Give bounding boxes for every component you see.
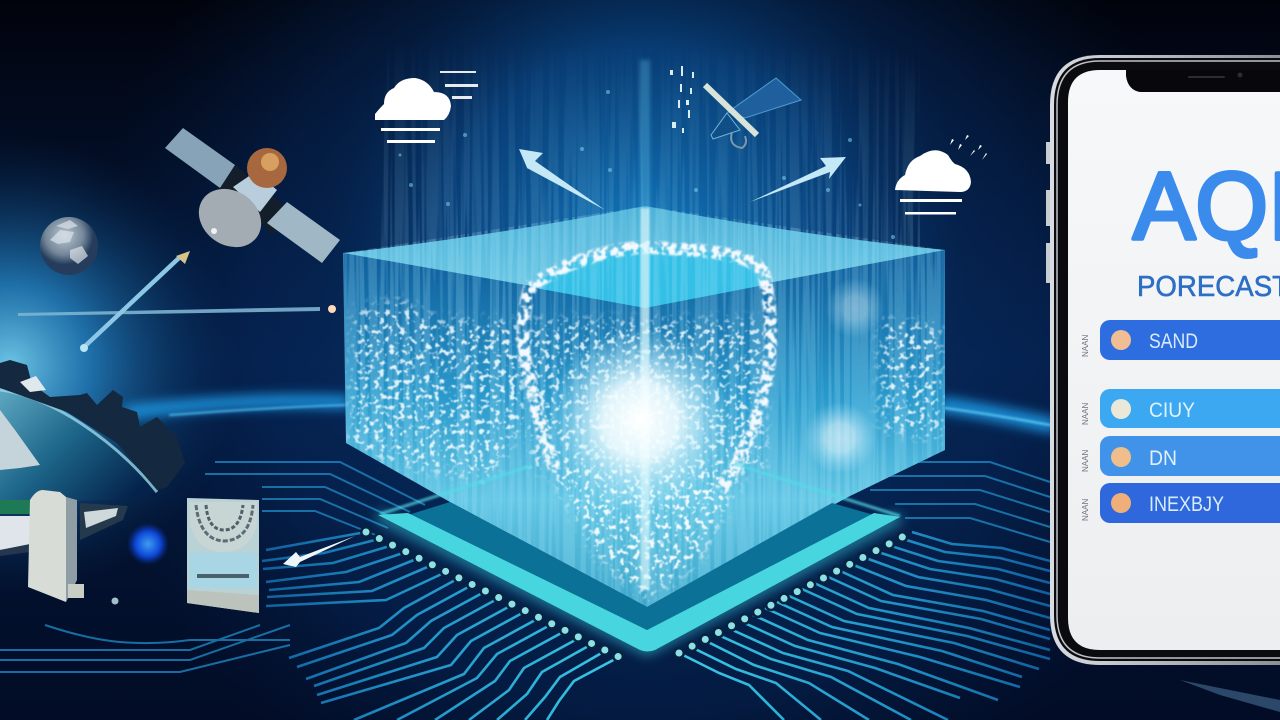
arrow up-left	[519, 149, 605, 210]
vertical beam	[640, 208, 650, 590]
planet earth with city skyline	[0, 360, 185, 556]
light rays above cube	[381, 58, 920, 248]
small arrow	[283, 536, 355, 567]
side buttons	[1046, 142, 1052, 283]
data beam	[18, 305, 336, 316]
small glow dot	[112, 598, 118, 604]
side labels: NAAN	[1081, 335, 1090, 357]
skyline	[0, 360, 185, 490]
floating data particles	[398, 90, 895, 246]
particle cloud	[345, 292, 945, 604]
snow landmass	[0, 410, 40, 470]
side faces	[343, 253, 647, 607]
side labels: NAAN	[1081, 403, 1090, 425]
horizontal glow lines behind cube	[130, 401, 1050, 425]
row: SAND	[1100, 320, 1280, 360]
blue orb	[127, 523, 169, 565]
row: DAY	[1100, 436, 1280, 476]
row: DAY: DN	[1149, 447, 1177, 470]
rocket arrow	[80, 251, 190, 352]
upper circuit traces	[0, 462, 1050, 672]
arrow up-right	[750, 157, 846, 202]
top face	[343, 206, 945, 306]
phone	[1046, 55, 1280, 665]
cloud icon left	[375, 71, 478, 143]
row: CITY	[1100, 389, 1280, 428]
circuit traces left of chip	[262, 532, 619, 720]
moon	[40, 217, 98, 275]
notch	[1126, 70, 1280, 92]
particle ring	[515, 240, 779, 495]
row: CITY: CIUY	[1149, 399, 1195, 422]
vertical streaks	[340, 200, 950, 610]
side labels	[1082, 335, 1088, 520]
side labels: NAAN	[1081, 499, 1090, 521]
chip base	[366, 464, 912, 657]
row: INDEX: INEXBJY	[1149, 493, 1224, 516]
chip pins	[366, 532, 912, 657]
rain cloud icon right	[895, 135, 987, 214]
cube	[340, 200, 950, 610]
satellite	[165, 128, 340, 263]
side labels: NAAN	[1081, 450, 1090, 472]
phone frame	[1050, 55, 1280, 665]
row: SAND: SAND	[1149, 330, 1198, 353]
row: INDEX	[1100, 483, 1280, 523]
sensor device left	[28, 490, 84, 602]
circuit traces right of chip	[679, 532, 1050, 720]
satellite dish icon top	[670, 66, 801, 148]
inner cyan arc	[530, 247, 764, 308]
core glow	[548, 328, 732, 512]
air quality monitor device	[187, 498, 259, 613]
phone screen	[1068, 70, 1280, 650]
coastal strip with ship	[0, 500, 30, 514]
